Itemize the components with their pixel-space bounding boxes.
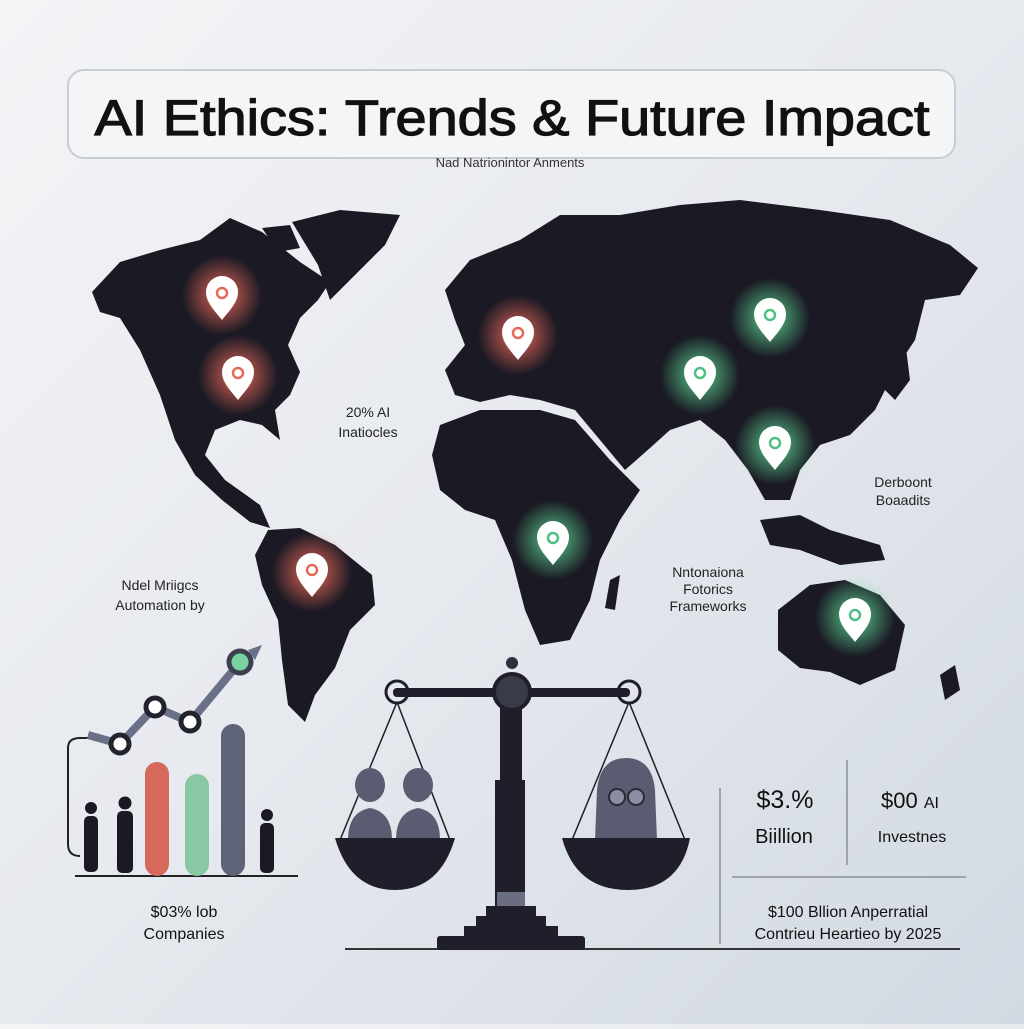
- madagascar: [605, 575, 620, 610]
- se asia islands: [760, 515, 885, 565]
- people silhouettes: [84, 796, 274, 873]
- north america: [92, 218, 330, 528]
- stat: 93% billion: $3.%: [757, 786, 813, 814]
- stats panel: [720, 760, 966, 944]
- new zealand: [940, 665, 960, 700]
- map label: frameworks: Frameworks: [669, 598, 747, 614]
- uk: [455, 305, 478, 345]
- robot head: [595, 758, 657, 840]
- stat: 100 billion: $100 Bllion Anperratial: [768, 904, 928, 921]
- eurasia: [445, 200, 978, 500]
- stats panel: Investnes: [878, 829, 946, 846]
- chart caption: Companies: [144, 926, 224, 943]
- map label: automation: Automation by: [115, 597, 205, 613]
- map label: boards: Boaadits: [876, 492, 930, 508]
- chart caption: $03% lob: [151, 904, 217, 921]
- stat: 900 AI investments: $00 AI: [881, 788, 939, 813]
- map label: frameworks: Fotorics: [683, 581, 733, 597]
- scale of justice: humans vs AI: [335, 657, 960, 950]
- human figures: [348, 768, 440, 840]
- title box: [68, 70, 955, 158]
- map label: incidents: 20% AI: [346, 404, 390, 420]
- subtitle: Nad Natrionintor Anments: [436, 155, 585, 170]
- stat: 100 billion: Contrieu Heartieo by 2025: [755, 926, 941, 943]
- map pins: green (frameworks): [513, 278, 895, 657]
- africa: [432, 410, 640, 645]
- world map: [92, 200, 978, 722]
- map label: frameworks: Nntonaiona: [672, 564, 744, 580]
- australia: [778, 580, 905, 685]
- stats panel: Biillion: [755, 826, 813, 848]
- chart: automation bars with people: [68, 645, 298, 876]
- japan: [885, 340, 910, 400]
- south america: [255, 528, 375, 722]
- map pins: red (risk): [182, 255, 558, 612]
- map label: boards: Derboont: [874, 474, 932, 490]
- map label: incidents: Inatiocles: [338, 424, 398, 440]
- map label: automation: Ndel Mriigcs: [121, 577, 199, 593]
- title box: AI Ethics: Trends & Future Impact: [94, 90, 930, 146]
- greenland: [292, 210, 400, 300]
